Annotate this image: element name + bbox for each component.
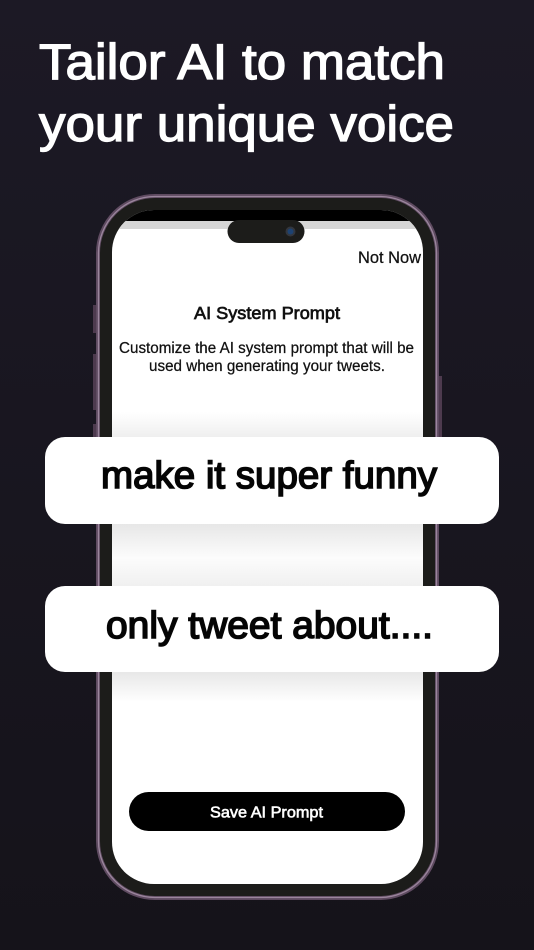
save button: Save AI Prompt <box>210 804 324 822</box>
screen heading: AI System Prompt <box>194 303 340 323</box>
phone screen <box>112 210 423 884</box>
camera lens <box>286 226 296 236</box>
screen description: Customize the AI system prompt that will be <box>119 340 414 357</box>
dynamic island <box>228 220 304 243</box>
not now link: Not Now <box>358 249 421 267</box>
screen description <box>119 340 414 375</box>
phone mockup <box>93 196 442 898</box>
phone side buttons <box>93 305 442 480</box>
title: Tailor AI to match <box>39 34 445 90</box>
card: only tweet about: only tweet about.... <box>106 605 433 647</box>
card: only tweet about <box>45 586 499 672</box>
card: make it super funny <box>45 437 499 524</box>
save button <box>129 792 405 831</box>
title <box>39 34 454 152</box>
phone frame <box>98 196 437 898</box>
screen description: used when generating your tweets. <box>149 358 385 375</box>
title: your unique voice <box>39 96 454 152</box>
card: make it super funny: make it super funny <box>101 455 437 497</box>
